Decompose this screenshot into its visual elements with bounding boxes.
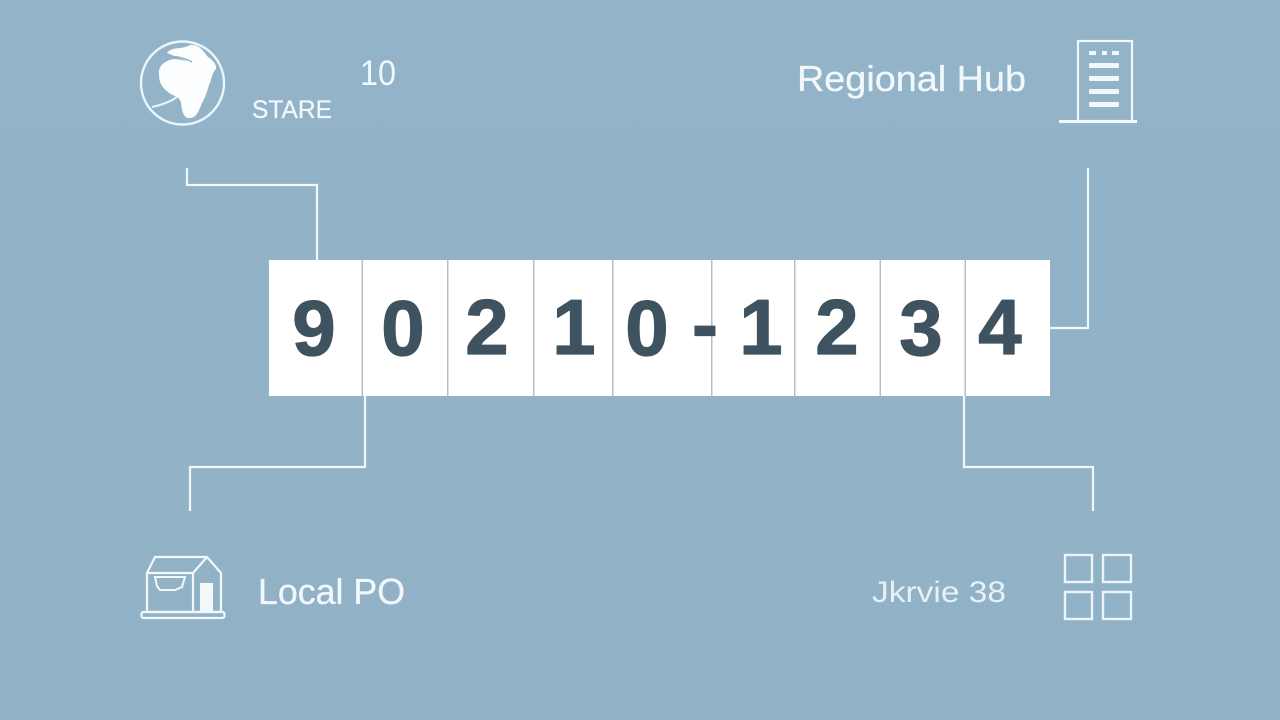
digit: 2: 2: [465, 283, 509, 371]
digit: 1: 1: [552, 283, 596, 371]
connector: top left: [187, 168, 317, 260]
connector: bottom left: [190, 396, 365, 511]
icon: post office: [142, 557, 224, 618]
label: Regional Hub: Regional Hub: [797, 58, 1026, 99]
digit: 0: 0: [381, 284, 425, 372]
icon: globe: [141, 42, 224, 124]
hyphen: -: [692, 280, 718, 368]
digit: 1: 1: [739, 283, 783, 371]
label: 10: 10: [360, 54, 396, 93]
digit: 9: 9: [292, 284, 336, 372]
label: STARE: STARE: [252, 96, 332, 124]
cell dividers: [362, 260, 966, 396]
digit: 2: 2: [815, 283, 859, 371]
icon: grid of squares: [1065, 555, 1131, 619]
digit: 3: 3: [899, 284, 943, 372]
connector: bottom right: [964, 396, 1093, 511]
digit: 4: 4: [978, 283, 1022, 371]
label: Local PO: Local PO: [258, 571, 405, 612]
label: garbled caption: Jkrvie 38: [872, 576, 1006, 609]
connector: top right: [1050, 168, 1088, 328]
icon: office building: [1059, 41, 1137, 123]
digit: 0: 0: [625, 284, 669, 372]
panel: postal code strip: [269, 260, 1050, 396]
strip background: [269, 260, 1050, 396]
